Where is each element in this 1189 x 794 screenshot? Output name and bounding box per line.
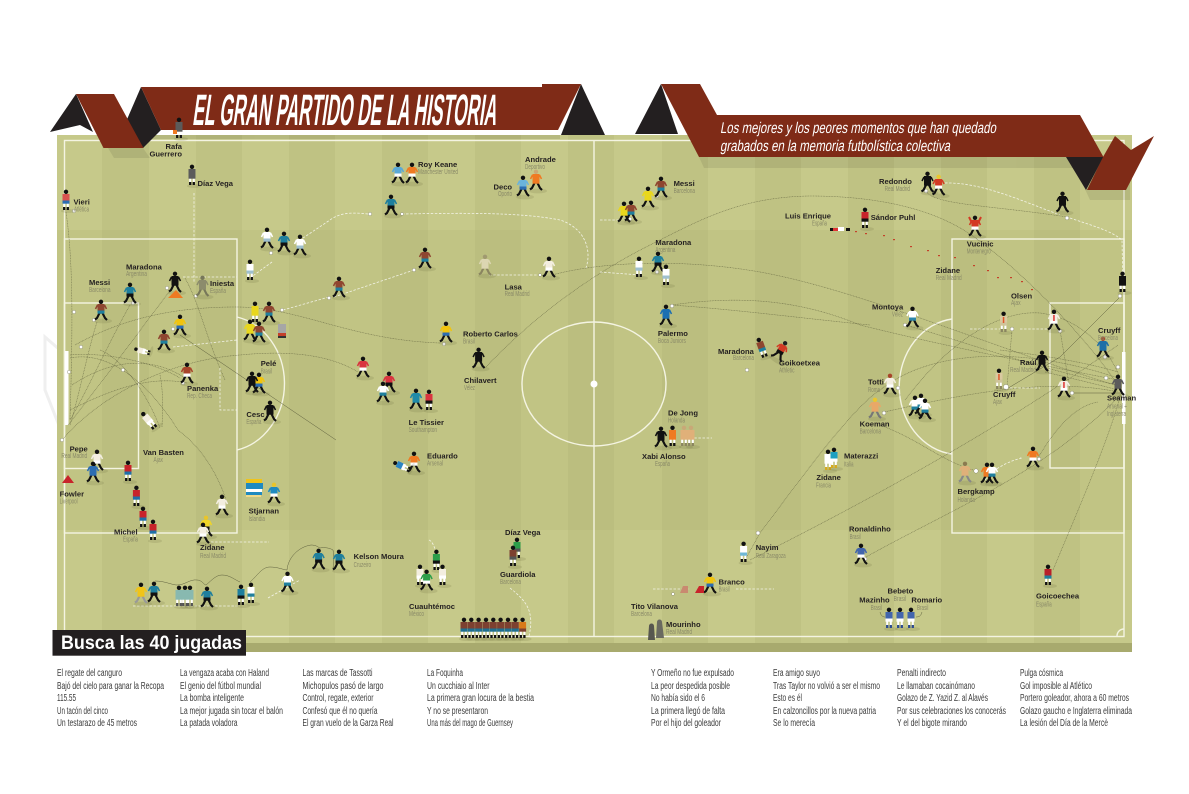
play: Cruyff Barcelona: Cruyff [1098,326,1121,335]
list column 5: No había sido el 6 [651,693,705,704]
play: Le Tissier: Southampton [409,425,437,434]
play: Chilavert: Vélez [464,383,475,392]
play: Ajax penalty, Cruyff [993,310,1075,406]
play: Cuauhtémoc: México [409,609,424,618]
play: Tito Vilanova and Mourinho: Mourinho [666,620,701,629]
list column 4: Una más del mago de Guernsey [427,718,513,729]
play: Totti: Roma [868,385,880,394]
play: Maradona and Goikoetxea: Athletic [779,366,795,374]
list column 1: Bajó del cielo para ganar la Recopa [57,681,164,692]
play: Seaman: Arsenal + [1107,402,1127,410]
play: wall of nine players [459,618,532,641]
list column 5: Y Ormeño no fue expulsado [651,668,734,679]
list column 2: La vengaza acaba con Haland [180,668,269,679]
play: Lasa: Real Madrid [505,289,530,298]
list column 3 [302,668,394,729]
ball trajectories: dark dotted lines [62,190,1121,570]
subtitle: Los mejores y los peores momentos que han quedado [719,120,999,137]
list column 2: La bomba inteligente [180,693,244,704]
play: yellow and blaugrana cluster [243,302,286,345]
play: Zidane volley: Real Madrid [200,551,226,560]
play: Montoya: Montoya [872,302,904,312]
play: Maradona centre: Argentina [655,245,676,254]
play: Messi and Maradona left box: España [210,286,227,295]
panel: football pitch [57,135,1132,652]
play: Maradona centre: Maradona [655,238,692,247]
play: Vucinic: Vucinic [967,240,994,248]
play: Roberto Carlos: Brasil [463,336,475,346]
list column 5 [651,668,734,729]
play: Andrade and Deco: Deportivo [525,162,545,171]
play: Bergkamp: Bergkamp [958,487,995,496]
play: Montoya [872,302,924,330]
play: Raúl [1010,351,1053,374]
play: Branco: Brasil [719,584,730,594]
play: Chilavert: Chilavert [464,376,497,385]
play: Cruyff Barcelona: Barcelona [1098,333,1118,342]
play: Vucinic [967,216,994,256]
list column 4: Y no se presentaron [427,706,488,717]
play: Stjarnan [246,479,285,523]
play: Palermo: Boca Juniors [658,336,686,345]
play: Seaman: Seaman [1107,394,1136,402]
play: Ajax penalty, Cruyff: Ajax [993,397,1002,406]
play: Tito Vilanova and Mourinho: Real Madrid [666,627,692,636]
list column 6: Se lo merecía [773,718,815,729]
play: Messi right side: Barcelona [674,186,696,195]
play: Díaz Vega and Guardiola: Díaz Vega [505,528,541,537]
play: Van Basten [138,407,184,464]
play: Kelson Moura: Kelson Moura [354,552,405,561]
play: Palermo: Palermo [658,329,688,338]
list column 1 [57,668,164,729]
list column 2: La mejor jugada sin tocar el balón [180,706,283,717]
play: Andrade and Deco: Oporto [498,189,512,198]
center spot and goals [65,351,1126,425]
play: Palermo [658,305,688,345]
play: Roberto Carlos [439,322,518,346]
list column 5: Por el hijo del goleador [651,718,721,729]
play: Messi and Maradona left box [89,262,235,357]
play: Le Tissier: Le Tissier [409,418,444,427]
play: Panenka: Panenka [187,384,219,393]
list column 5: La primera llegó de falta [651,706,725,717]
list column 8: La lesión del Día de la Mercè [1020,718,1108,729]
play: black goalkeeper top right [1118,272,1132,295]
list column 7: Y el del bigote mirando [897,718,967,729]
play: Zidane and Olsen labels: Olsen [1011,292,1032,300]
list column 3: Michopulos pasó de largo [302,681,384,692]
play: Michel [114,486,162,544]
play: Luis Enrique and Sándor Puhl: Sándor Puhl [871,213,915,222]
play: Luis Enrique and Sándor Puhl: España [812,218,827,228]
play: Messi and Maradona left box: Iniesta [210,279,235,288]
play: Nayim [739,542,786,565]
subtitle line 2: grabados en la memoria futbolística colectiva [719,138,953,155]
play: Branco [680,573,745,596]
play: Zidane and Olsen labels: Ajax [1011,298,1021,307]
callout: Busca las 40 jugadas: Busca las 40 jugadas [61,633,242,654]
ball trajectories: white dashed lines [133,183,1123,636]
play: Koeman [860,394,936,436]
play: De Jong and Xabi Alonso: España [655,459,670,468]
play: Messi right side: Messi [674,179,695,188]
play: Seaman: Inglaterra [1107,409,1126,418]
play: Roy Keane: Manchester United [418,167,458,176]
play: Materazzi and Zidane: Materazzi [844,452,878,460]
list column 6: Era amigo suyo [773,668,820,679]
play: Nayim: Nayim [756,543,779,552]
list column 3: Control, regate, exterior [302,693,374,704]
play: Eduardo: Eduardo [427,452,458,460]
play: Raúl: Raúl [1020,358,1036,367]
play: Pepe and Fowler: Fowler [60,490,84,498]
list column 7 [897,668,1006,729]
play: Maradona centre [634,238,692,288]
play: Luis Enrique and Sándor Puhl: Luis Enrique [785,212,831,220]
play: De Jong and Xabi Alonso: Xabi Alonso [642,452,686,461]
list column 4 [427,668,534,729]
play: Chilavert [464,348,497,392]
play: Maradona and Goikoetxea: Maradona [718,347,755,356]
play: Vieri: Atlética [74,204,89,214]
banner: title ribbon [50,84,605,148]
play: Lasa: Lasa [505,282,523,292]
play: Lasa [478,255,560,298]
play: Michel: Michel [114,528,138,536]
list column 1: Un testarazo de 45 metros [57,718,137,729]
play: Roy Keane: Roy Keane [418,160,457,169]
list column 6: En calzoncillos por la nueva patria [773,706,876,717]
play: Messi right side [617,177,696,225]
play: Redondo: Real Madrid [885,184,910,193]
play: Materazzi and Zidane: Italia [844,460,854,468]
play: Rafa Guerrero: Guerrero [150,150,182,158]
play: Kelson Moura [134,549,405,610]
play: Bebeto, Mazinho, Romario: Brasil [894,594,906,603]
list column 6 [773,668,880,729]
list column 7: Le llamaban cocainómano [897,681,975,692]
play: Tito Vilanova and Mourinho: Barcelona [631,609,653,618]
background watermark [45,337,60,428]
list column 8: Golazo gaucho e Inglaterra eliminada [1020,706,1132,717]
play: Messi and Maradona left box: Messi [89,278,110,287]
list column 3: Confesó que él no quería [302,706,378,717]
play: Stjarnan: Islandia [249,514,266,523]
list column 2: El genio del fútbol mundial [180,681,261,692]
play: Rafa Guerrero: Rafa [166,142,183,151]
play: Eduardo [391,452,458,475]
play: Pepe and Fowler: Liverpool [60,496,78,506]
play: Pelé: Pelé [261,359,276,368]
play: Bebeto, Mazinho, Romario [859,586,943,631]
play: Eduardo: Arsenal [427,458,443,468]
play: Redondo [879,172,1074,215]
play: Maradona and Goikoetxea: Barcelona [733,353,755,362]
play: Roberto Carlos: Roberto Carlos [463,330,518,338]
play: Koeman: Koeman [860,420,890,428]
play: Cuauhtémoc [409,550,455,618]
list column 4: La Foquinha [427,668,463,679]
play: Maradona Argentina run [245,195,436,300]
play: Koeman: Barcelona [860,426,882,436]
play: Pepe and Fowler: Real Madrid [61,451,87,460]
play: Cuauhtémoc: Cuauhtémoc [409,602,455,611]
play: Ronaldinho [849,524,891,567]
play: Rafa Guerrero [150,118,188,158]
list column 7: Por sus celebraciones los conocerás [897,706,1006,717]
play: De Jong and Xabi Alonso: Holanda [668,416,685,424]
play: Bergkamp: Holanda [958,495,976,504]
play: De Jong and Xabi Alonso [642,408,700,468]
play: Andrade and Deco: Andrade [525,155,556,164]
play: Díaz Vega top [187,165,234,188]
play: Bebeto, Mazinho, Romario: Romario [911,596,943,604]
play: Redondo: Redondo [879,177,912,186]
play: Goicoechea: Goicoechea [1036,592,1080,600]
play: Díaz Vega and Guardiola: Guardiola [500,570,536,579]
play: Pepe and Fowler [60,444,137,506]
play: Andrade and Deco [494,155,556,199]
play: Ronaldinho: Ronaldinho [849,524,891,534]
list column 8: Portero goleador, ahora a 60 metros [1020,693,1129,704]
play: Cesc: Cesc [246,410,265,419]
play: Totti [868,374,901,397]
list column 3: El gran vuelo de la Garza Real [302,718,394,729]
play: De Jong and Xabi Alonso: De Jong [668,408,698,418]
play: Stjarnan: Stjarnan [249,506,279,516]
list column 1: El regate del canguro [57,668,122,679]
play: Cesc: España [246,417,262,426]
play: Zidane and Olsen labels: Real Madrid [936,273,962,282]
play: Vieri: Vieri [74,198,90,206]
play: Montoya: Vélez [892,310,903,318]
play: Cruyff Barcelona [1096,326,1121,360]
play: Materazzi and Zidane [816,448,878,490]
play: Panenka [180,363,219,400]
pitch markings [64,140,1124,637]
play: Ajax penalty, Cruyff: Cruyff [993,390,1016,399]
play: Zidane and Olsen labels [936,266,1032,307]
play: Pelé [245,359,276,396]
list column 1: Un tacón del cinco [57,706,108,717]
play: Ronaldinho: Brasil [850,532,861,541]
play: Zidane volley: Zidane [200,543,224,552]
banner: title ribbon: EL GRAN PARTIDO DE LA HISTORIA [191,86,501,135]
play: Messi and Maradona left box: Maradona [126,262,163,272]
play: Michel: España [123,534,138,544]
play: Andrade and Deco: Deco [494,182,512,192]
play: Vucinic: Montenegro [967,246,991,256]
play: Seaman [1107,375,1136,418]
penalty walk trail: red dashes [855,231,1033,290]
play: Panenka: Rep. Checa [187,391,213,400]
list column 3: Las marcas de Tassotti [302,668,372,679]
play: Cesc [246,401,281,426]
play: Van Basten: Van Basten [143,448,184,457]
list column 7: Golazo de Z. Yazid Z. al Alavés [897,693,988,704]
play: Roy Keane [391,160,458,186]
list column 8 [1020,668,1132,729]
play: Bergkamp [958,447,1044,504]
list column 2 [180,668,283,729]
play: Díaz Vega top: Díaz Vega [198,179,234,188]
list column 1: 115.55 [57,693,76,704]
play: Pelé: Brasil [261,366,272,376]
list column 6: Tras Taylor no volvió a ser el mismo [773,681,880,692]
play: Van Basten: Ajax [154,455,163,464]
banner shadows [103,135,1130,200]
play: Pepe and Fowler: Pepe [70,444,88,454]
list column 7: Penalti indirecto [897,668,946,679]
play: Totti: Totti [868,378,884,386]
list column 8: Pulga cósmica [1020,668,1063,679]
play: Vieri [61,190,90,214]
banner: subtitle ribbon [635,84,1154,190]
play: Maradona and Goikoetxea [718,335,821,374]
play: Tito Vilanova and Mourinho [631,602,701,640]
play: Messi and Maradona left box: Argentina [126,269,148,278]
list column 6: Esto es él [773,693,802,704]
list column 4: La primera gran locura de la bestia [427,693,534,704]
play: Le Tissier [356,357,444,434]
play: Tito Vilanova and Mourinho: Tito Vilanova [631,602,679,611]
play: Materazzi and Zidane: Francia [816,480,831,490]
list column 2: La patada voladora [180,718,238,729]
play: Goicoechea [1036,565,1080,608]
list column 4: Un cucchiaio al Inter [427,681,490,692]
jump arcs: bottom dribble [155,545,334,585]
play: Maradona and Goikoetxea: Goikoetxea [779,358,821,368]
play: Bebeto, Mazinho, Romario: Brasil [917,603,929,612]
play: Luis Enrique and Sándor Puhl [785,208,915,231]
play: Messi and Maradona left box: Barcelona [89,285,111,294]
play: Nayim: Real Zaragoza [756,551,786,560]
play: Bebeto, Mazinho, Romario: Bebeto [888,586,914,596]
list column 8: Gol imposible al Atlético [1020,681,1092,692]
play: Branco: Branco [719,578,745,586]
play: Goicoechea: España [1036,600,1052,608]
play: Kelson Moura: Cruzeiro [354,560,371,569]
play: Díaz Vega and Guardiola: Barcelona [500,577,522,586]
list column 5: La peor despedida posible [651,681,730,692]
play: Raúl: Real Madrid [1010,365,1036,374]
play: Zidane and Olsen labels: Zidane [936,266,960,275]
play: Materazzi and Zidane: Zidane [816,473,841,482]
play: Díaz Vega and Guardiola [500,528,541,586]
play: Zidane volley [196,495,233,560]
play: Bebeto, Mazinho, Romario: Brasil [871,603,882,612]
balls [60,189,1122,596]
play: Bebeto, Mazinho, Romario: Mazinho [859,596,890,604]
